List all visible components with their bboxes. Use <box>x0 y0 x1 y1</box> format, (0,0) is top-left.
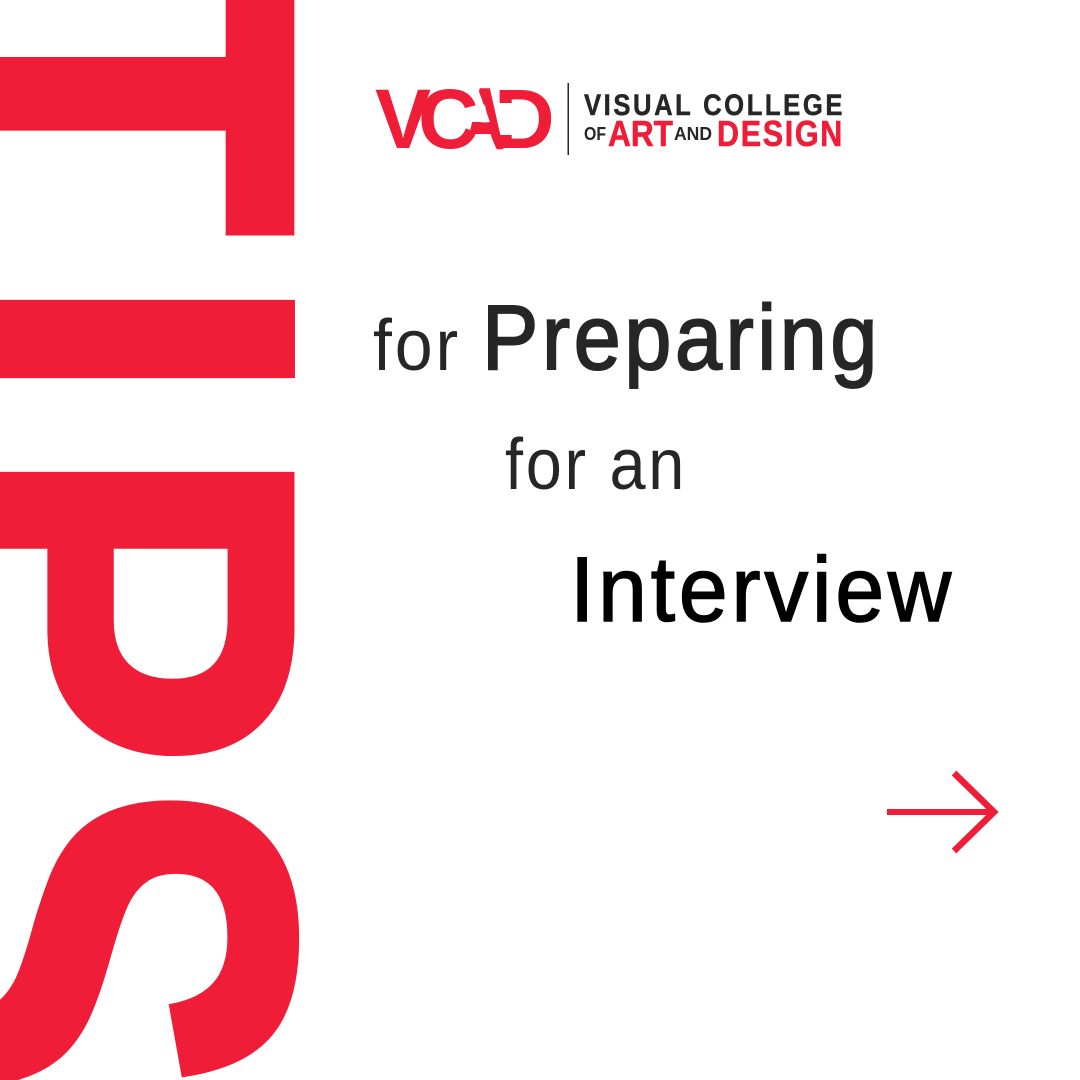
heading line 2: for an: for an <box>505 425 687 505</box>
icon: arrow pointing right <box>887 773 994 851</box>
logo mark: VCAD: D <box>494 72 555 166</box>
giant rotated title: TIPS <box>0 0 436 1080</box>
logo divider <box>568 83 569 155</box>
logo name: and: AND <box>674 124 712 144</box>
logo name: of: OF <box>584 124 606 144</box>
logo <box>376 83 842 155</box>
logo name: Visual College: VISUAL COLLEGE <box>584 89 845 122</box>
heading line 1: for: for <box>373 306 461 386</box>
logo mark: VCAD: C <box>418 72 479 166</box>
logo name: Design: DESIGN <box>717 113 844 154</box>
logo name: Art: ART <box>608 113 673 154</box>
logo mark: VCAD <box>376 88 552 150</box>
logo mark: VCAD: A <box>466 72 504 166</box>
heading line 3: Interview: Interview <box>570 539 955 641</box>
heading line 1: Preparing: Preparing <box>482 287 881 389</box>
logo mark: VCAD: V <box>375 72 431 166</box>
